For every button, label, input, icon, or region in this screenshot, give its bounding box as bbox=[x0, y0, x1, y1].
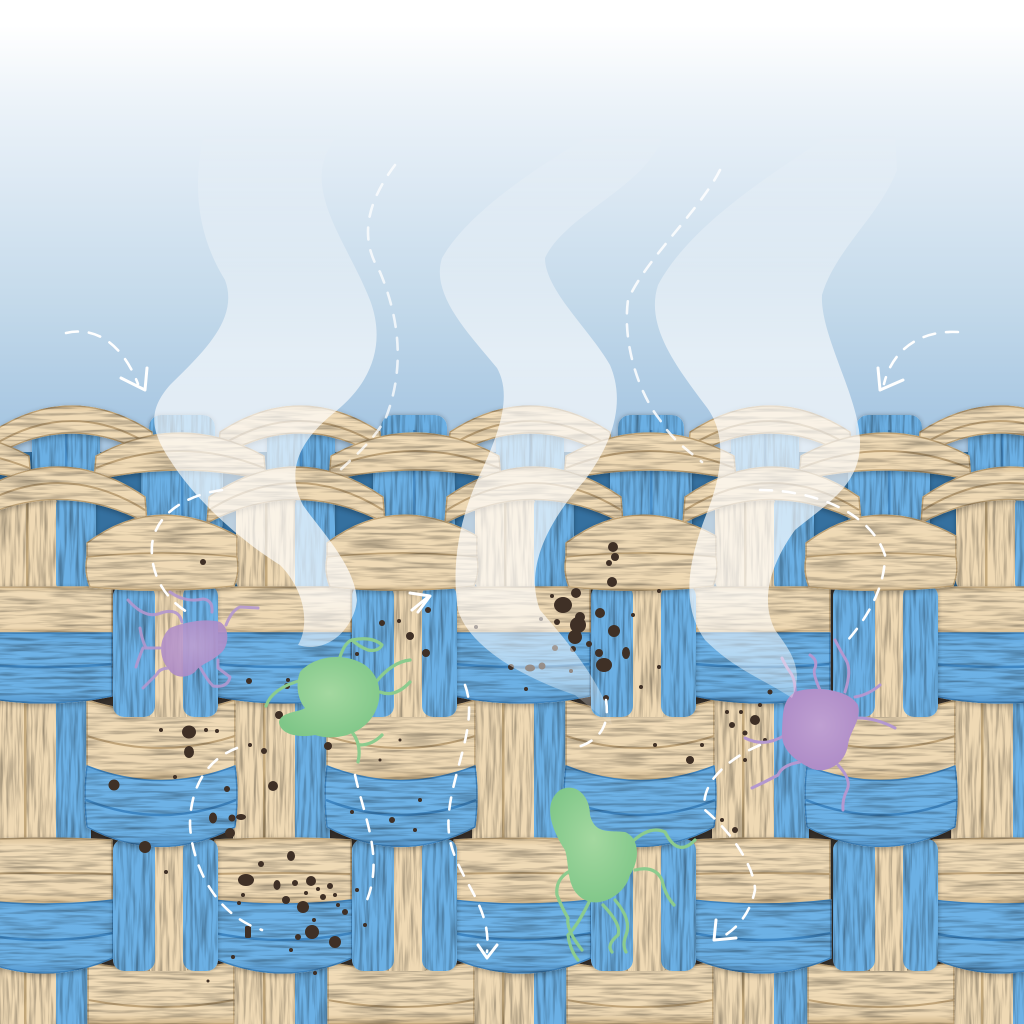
path: short dashes near centre vapour bbox=[578, 700, 607, 747]
vapour wisp: centre bbox=[440, 125, 662, 725]
arrow: lower-right downward bbox=[704, 745, 760, 940]
arrow: top-left inflow bbox=[66, 331, 147, 390]
dashed airflow arrows bbox=[66, 165, 958, 958]
vapour wisp: left bbox=[154, 125, 377, 647]
weave: middle bands bbox=[0, 587, 1024, 846]
dirt specks bbox=[108, 542, 772, 982]
arrow: top-right inflow bbox=[878, 332, 958, 390]
path: rising dashes left of centre bbox=[335, 165, 398, 475]
weave: top beige arches bbox=[0, 406, 1024, 480]
weave: bottom bands bbox=[0, 838, 1024, 1024]
weave: third row beige arches bbox=[0, 467, 1024, 523]
weave: lower triple vertical strands bbox=[113, 839, 938, 971]
weave: upper blue warp strands bbox=[32, 415, 1024, 530]
arrow: centre downward bbox=[448, 685, 497, 958]
bacterium: purple left bbox=[128, 592, 258, 688]
weave: long vertical strands bbox=[0, 695, 1024, 1024]
path: loop over left bacterium bbox=[152, 490, 222, 615]
weave: double beige bands bbox=[86, 515, 957, 590]
vapour wisps rising from the fabric bbox=[154, 125, 897, 725]
bacterium: green lower bbox=[550, 788, 695, 960]
weave: upper triple vertical strands bbox=[113, 585, 938, 717]
weave gaps: dark backing bbox=[0, 452, 1024, 1024]
bacterium: purple right bbox=[745, 640, 895, 810]
arrow: small up-right arrowhead bbox=[355, 593, 430, 905]
woven basket fabric bbox=[0, 406, 1024, 1024]
path: rising dashes right of centre bbox=[627, 170, 720, 462]
bacterium: green upper bbox=[266, 639, 410, 762]
weave: beige and blue vertical strands under third row bbox=[0, 498, 1024, 590]
path: lower-left curve bbox=[190, 748, 262, 930]
vapour wisp: right bbox=[655, 130, 897, 698]
path: right upper loop bbox=[760, 490, 885, 640]
